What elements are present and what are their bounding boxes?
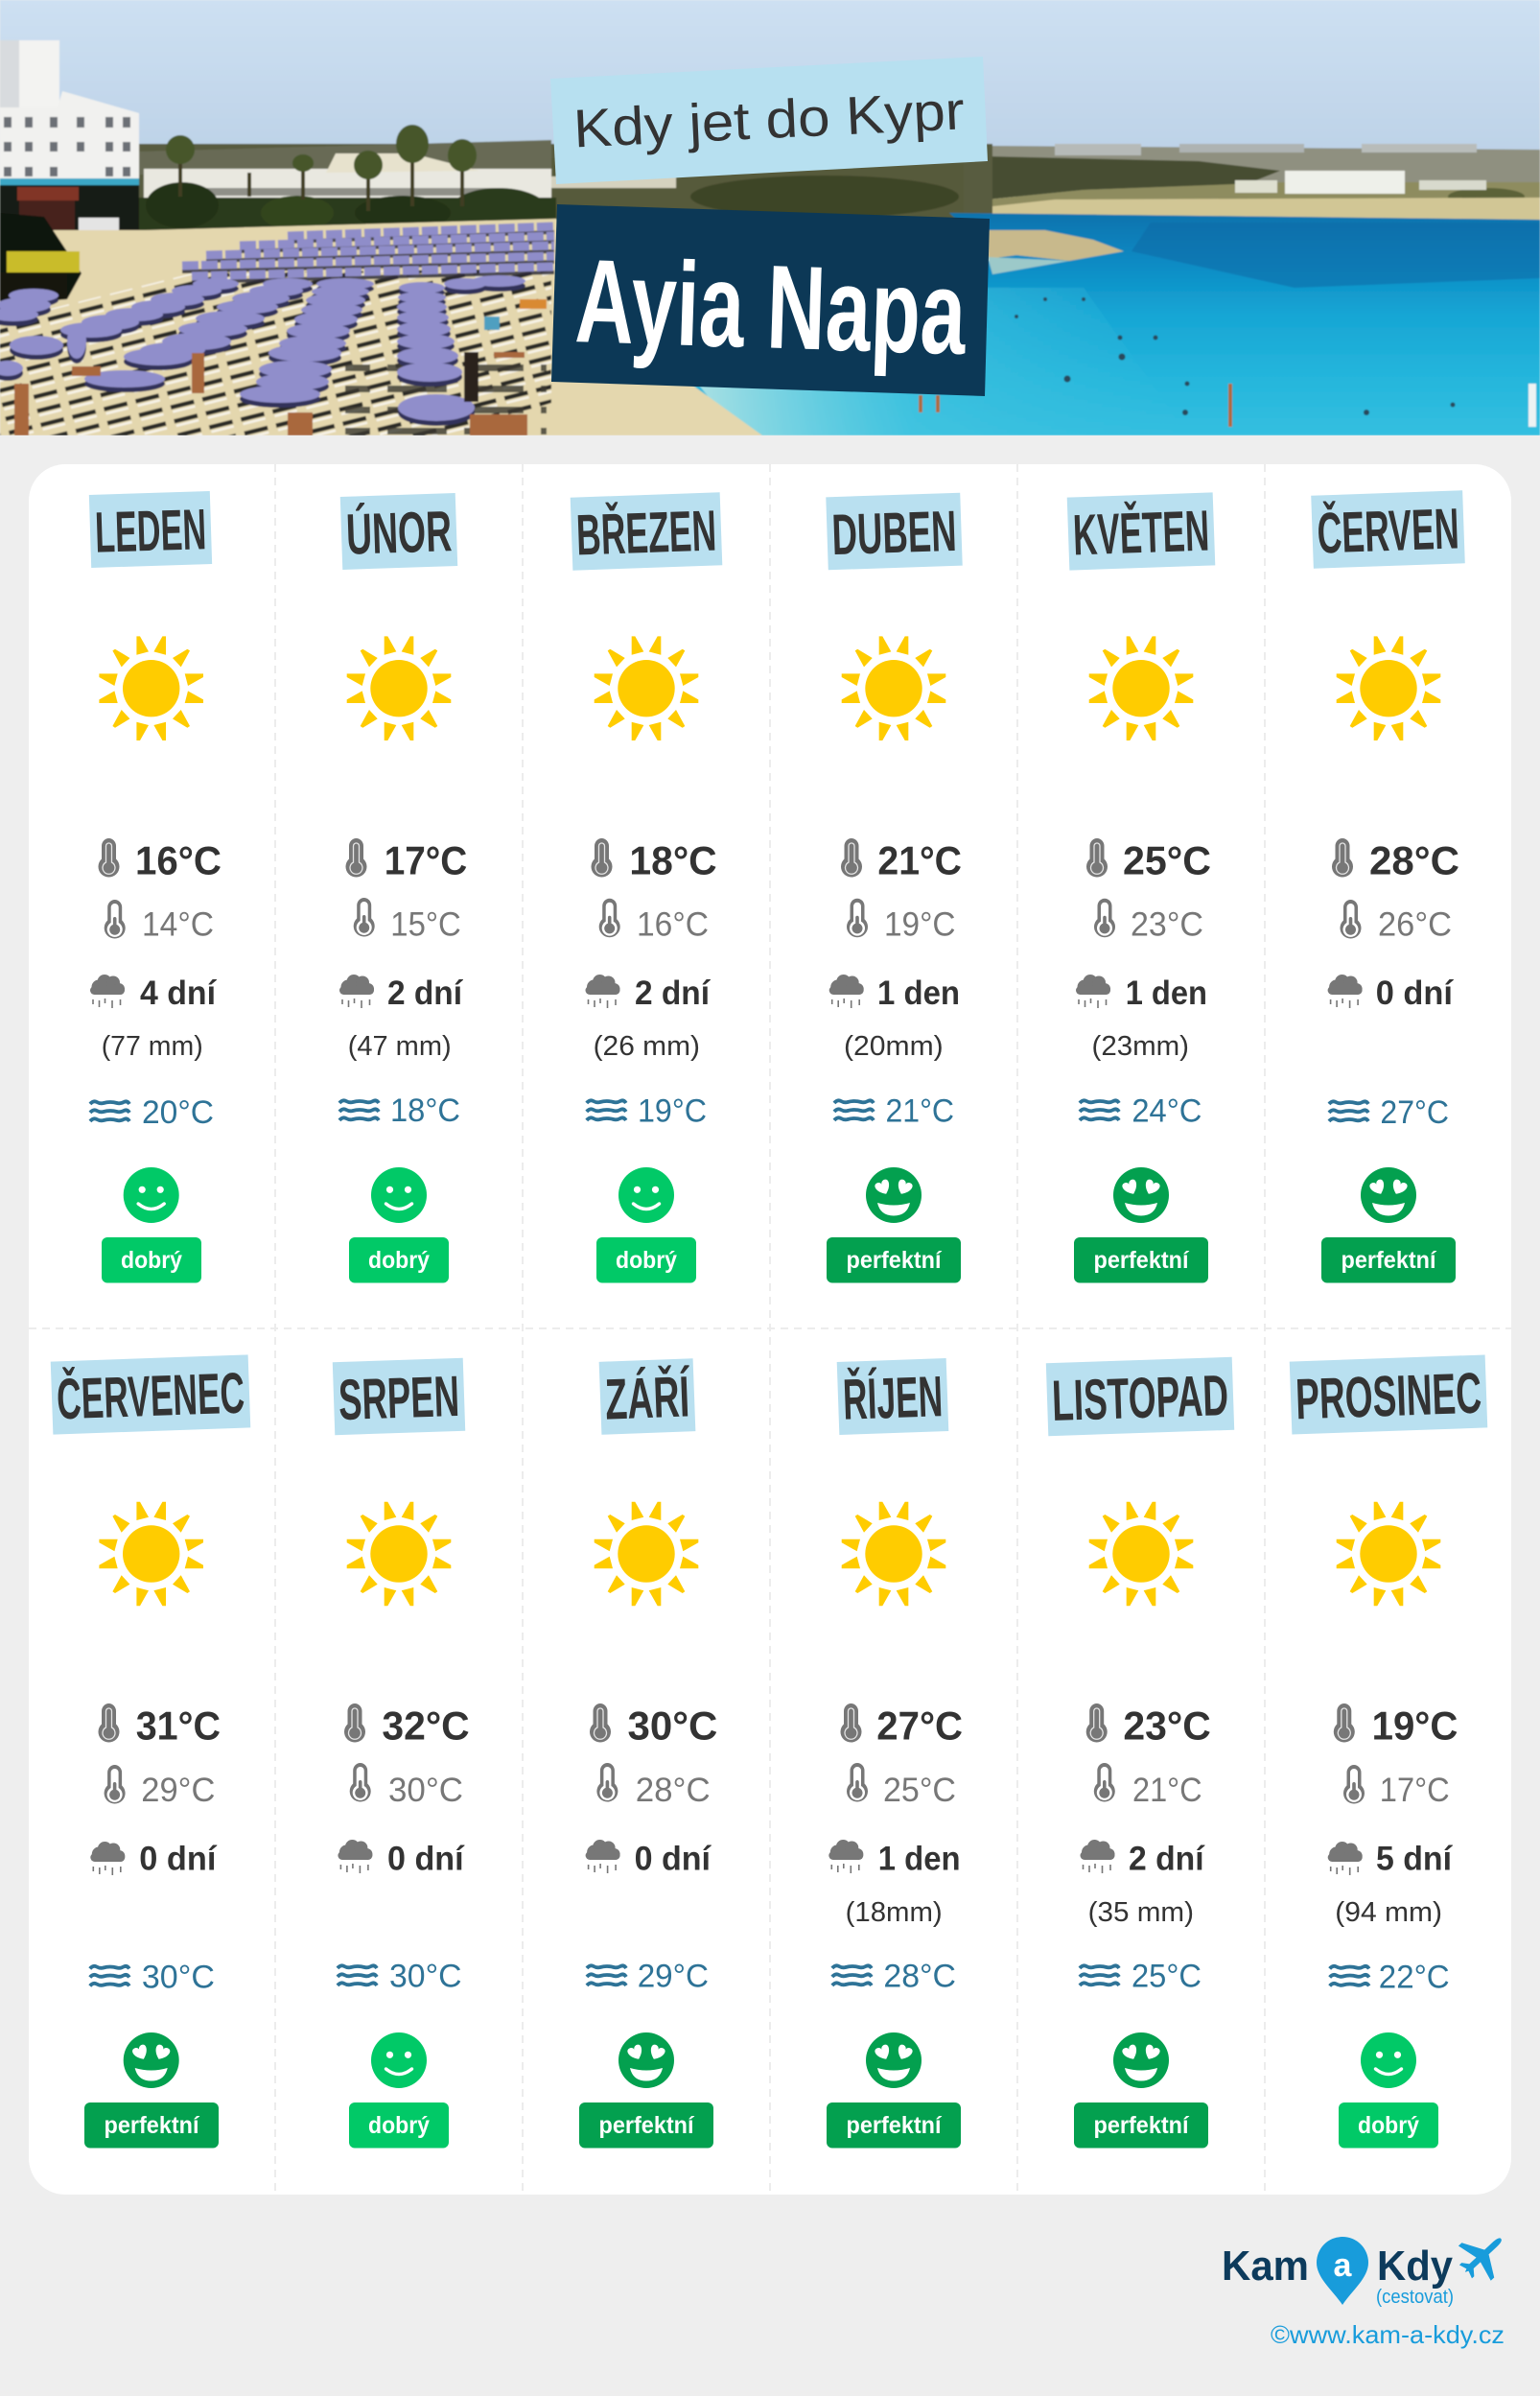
- icon: smiley: [1361, 2032, 1416, 2088]
- rating badge: perfektní: [846, 2112, 942, 2139]
- icon: thermometer min: [596, 1763, 618, 1802]
- icon: thermometer min: [350, 1763, 371, 1802]
- icon: waves: [1330, 1966, 1369, 1985]
- month heading: [51, 1354, 250, 1435]
- rating badge: perfektní: [598, 2112, 694, 2139]
- rating badge: [827, 2102, 961, 2149]
- month heading: [599, 1358, 695, 1435]
- rainfall: (94 mm): [1335, 1897, 1442, 1928]
- icon: sun: [595, 636, 698, 740]
- rain days: 2 dní: [387, 975, 463, 1012]
- icon: thermometer min: [847, 1763, 868, 1802]
- month heading: [837, 1358, 948, 1435]
- max temperature: 18°C: [629, 838, 717, 882]
- icon: smiley: [618, 1167, 674, 1223]
- icon: rain cloud: [585, 975, 619, 1008]
- icon: waves: [832, 1965, 872, 1985]
- rating badge: [1339, 2102, 1438, 2149]
- icon: thermometer max: [345, 838, 366, 878]
- rating badge: dobrý: [121, 1247, 182, 1274]
- panel: prosinec: [1290, 1354, 1487, 2149]
- icon: waves: [90, 1101, 129, 1121]
- icon: thermometer min: [1094, 899, 1115, 937]
- icon: rain cloud: [1076, 975, 1110, 1008]
- website credit: ©www.kam-a-kdy.cz: [1271, 2320, 1505, 2349]
- title: Kdy jet do Kypr: Kdy jet do Kypr: [572, 80, 966, 158]
- sea temperature: 30°C: [142, 1960, 215, 1996]
- min temperature: 29°C: [141, 1772, 215, 1809]
- header photo: Ayia Napa beach: [0, 0, 1540, 435]
- icon: smiley: [124, 1167, 179, 1223]
- icon: rain cloud: [1080, 1840, 1114, 1873]
- icon: thermometer max: [1332, 838, 1353, 878]
- sea temperature: 21°C: [886, 1092, 954, 1129]
- rainfall: (26 mm): [594, 1031, 700, 1062]
- icon: rain cloud: [586, 1840, 620, 1873]
- max temperature: 19°C: [1372, 1703, 1458, 1748]
- icon: rain cloud: [339, 975, 374, 1008]
- month heading: [333, 1358, 465, 1435]
- panel: květen: [1067, 492, 1215, 1283]
- icon: heart-eyes smiley: [866, 2032, 922, 2088]
- panel: listopad: [1046, 1357, 1234, 2149]
- rain days: 1 den: [878, 1841, 961, 1878]
- rain days: 0 dní: [139, 1841, 218, 1878]
- min temperature: 23°C: [1131, 906, 1203, 944]
- rating badge: [596, 1237, 696, 1283]
- icon: location pin: [1317, 2237, 1368, 2305]
- sea temperature: 24°C: [1132, 1092, 1202, 1129]
- icon: thermometer min: [1094, 1763, 1115, 1802]
- month heading: SRPEN: [338, 1364, 460, 1432]
- rating badge: perfektní: [1093, 2112, 1189, 2139]
- rain days: 0 dní: [1376, 975, 1454, 1012]
- month heading: ŘÍJEN: [842, 1364, 944, 1432]
- icon: thermometer max: [344, 1703, 365, 1743]
- icon: waves: [587, 1100, 626, 1120]
- min temperature: 16°C: [637, 906, 709, 944]
- icon: location pin: a: [1334, 2247, 1353, 2284]
- rainfall: (35 mm): [1088, 1897, 1194, 1928]
- month heading: ÚNOR: [345, 499, 453, 567]
- rainfall: (23mm): [1091, 1031, 1189, 1062]
- rating badge: perfektní: [104, 2112, 199, 2139]
- icon: smiley: [371, 1167, 427, 1223]
- rating badge: [1074, 1237, 1208, 1283]
- panel: červen: [1311, 490, 1465, 1282]
- sea temperature: 25°C: [1132, 1959, 1202, 1995]
- min temperature: 25°C: [883, 1772, 956, 1809]
- rain days: 2 dní: [635, 975, 711, 1012]
- month heading: LISTOPAD: [1051, 1363, 1229, 1433]
- panel: říjen: [827, 1358, 963, 2149]
- icon: sun: [842, 636, 945, 740]
- icon: sun: [595, 1502, 698, 1606]
- min temperature: 21°C: [1132, 1772, 1202, 1809]
- rating badge: dobrý: [368, 1247, 430, 1274]
- rating badge: perfektní: [1341, 1247, 1436, 1274]
- logo wordmark: Kdy: Kdy: [1377, 2243, 1454, 2290]
- icon: thermometer max: [840, 1703, 861, 1743]
- icon: waves: [587, 1965, 626, 1985]
- logo wordmark: Kam: Kam: [1222, 2243, 1309, 2290]
- rating badge: [827, 1237, 961, 1283]
- panel: leden: [89, 491, 222, 1283]
- icon: sun: [1089, 636, 1193, 740]
- month heading: [1311, 490, 1465, 569]
- rain days: 2 dní: [1129, 1841, 1205, 1878]
- max temperature: 27°C: [876, 1703, 963, 1748]
- panel: březen: [571, 492, 722, 1283]
- icon: thermometer min: [105, 900, 126, 939]
- rain days: 0 dní: [387, 1841, 465, 1878]
- rating badge: [1321, 1237, 1456, 1283]
- sea temperature: 29°C: [638, 1959, 709, 1995]
- rain days: 0 dní: [635, 1841, 712, 1878]
- rating badge: [84, 2102, 219, 2149]
- month heading: [571, 492, 722, 571]
- month heading: ČERVENEC: [56, 1361, 245, 1431]
- sea temperature: 20°C: [142, 1094, 214, 1131]
- logo: Kam a Kdy: [1222, 2221, 1517, 2308]
- min temperature: 17°C: [1380, 1772, 1450, 1809]
- icon: thermometer min: [599, 899, 620, 937]
- rating badge: [1074, 2102, 1208, 2149]
- rainfall: (47 mm): [348, 1031, 452, 1062]
- title: Ayia Napa: Ayia Napa: [573, 235, 968, 380]
- month heading: [1046, 1357, 1234, 1436]
- panel: duben: [826, 493, 963, 1283]
- icon: sun: [1337, 636, 1440, 740]
- icon: rain cloud: [1328, 1842, 1363, 1875]
- sea temperature: 19°C: [638, 1092, 707, 1129]
- icon: rain cloud: [828, 1840, 863, 1873]
- icon: waves: [834, 1100, 874, 1120]
- icon: smiley: [371, 2032, 427, 2088]
- rainfall: (18mm): [846, 1897, 943, 1928]
- icon: rain cloud: [1328, 975, 1363, 1008]
- max temperature: 28°C: [1369, 838, 1459, 882]
- icon: waves: [1329, 1101, 1368, 1121]
- icon: waves: [339, 1100, 379, 1120]
- rating badge: dobrý: [368, 2112, 430, 2139]
- max temperature: 32°C: [382, 1703, 470, 1748]
- month heading: DUBEN: [830, 499, 958, 567]
- icon: thermometer min: [847, 899, 868, 937]
- icon: sun: [842, 1502, 945, 1606]
- icon: rain cloud: [90, 1842, 125, 1875]
- sea temperature: 18°C: [390, 1092, 460, 1129]
- rating badge: perfektní: [1093, 1247, 1189, 1274]
- icon: thermometer max: [98, 1703, 119, 1743]
- icon: rain cloud: [90, 975, 125, 1008]
- icon: thermometer min: [354, 898, 375, 937]
- icon: thermometer max: [1086, 838, 1108, 878]
- icon: rain cloud: [829, 975, 864, 1008]
- icon: thermometer min: [105, 1765, 126, 1804]
- panel: monthly climate card: [29, 464, 1511, 2195]
- icon: thermometer max: [841, 838, 862, 878]
- month heading: ZÁŘÍ: [604, 1364, 691, 1432]
- rating badge: dobrý: [1358, 2112, 1419, 2139]
- month heading: LEDEN: [94, 497, 207, 565]
- panel: září: [579, 1358, 717, 2149]
- sea temperature: 30°C: [389, 1959, 462, 1995]
- icon: airplane: [1449, 2221, 1517, 2290]
- icon: heart-eyes smiley: [618, 2032, 674, 2088]
- icon: rain cloud: [338, 1840, 372, 1873]
- rainfall: (20mm): [844, 1031, 944, 1062]
- icon: thermometer min: [1341, 900, 1362, 939]
- icon: sun: [99, 1502, 203, 1606]
- icon: thermometer max: [98, 838, 119, 878]
- title: Kdy jet do Kypr: [550, 57, 988, 184]
- icon: heart-eyes smiley: [866, 1167, 922, 1223]
- sea temperature: 27°C: [1380, 1094, 1449, 1131]
- panel: červenec: [51, 1354, 250, 2149]
- sea temperature: 22°C: [1379, 1960, 1450, 1996]
- rating badge: [349, 2102, 449, 2149]
- max temperature: 16°C: [135, 838, 222, 882]
- icon: sun: [347, 636, 451, 740]
- max temperature: 17°C: [385, 838, 467, 882]
- icon: sun: [347, 1502, 451, 1606]
- month heading: KVĚTEN: [1072, 499, 1210, 567]
- icon: waves: [90, 1966, 129, 1985]
- min temperature: 19°C: [884, 906, 955, 944]
- rating badge: [349, 1237, 449, 1283]
- month heading: [826, 493, 963, 570]
- rating badge: [102, 1237, 201, 1283]
- min temperature: 30°C: [388, 1772, 463, 1809]
- icon: heart-eyes smiley: [124, 2032, 179, 2088]
- icon: thermometer max: [591, 838, 612, 878]
- max temperature: 30°C: [627, 1703, 717, 1748]
- logo tagline: (cestovat): [1376, 2287, 1454, 2308]
- icon: thermometer max: [1334, 1703, 1355, 1743]
- icon: sun: [1089, 1502, 1193, 1606]
- icon: heart-eyes smiley: [1113, 1167, 1169, 1223]
- rain days: 4 dní: [140, 975, 217, 1012]
- max temperature: 21°C: [877, 838, 962, 882]
- min temperature: 28°C: [636, 1772, 711, 1809]
- rain days: 1 den: [1126, 975, 1207, 1012]
- icon: thermometer max: [1086, 1703, 1108, 1743]
- rating badge: perfektní: [846, 1247, 942, 1274]
- icon: sun: [99, 636, 203, 740]
- icon: waves: [1080, 1100, 1119, 1120]
- icon: thermometer min: [1343, 1765, 1365, 1804]
- min temperature: 14°C: [142, 906, 214, 944]
- panel: srpen: [333, 1358, 470, 2149]
- month heading: [1067, 492, 1215, 571]
- rain days: 5 dní: [1376, 1841, 1453, 1878]
- min temperature: 26°C: [1378, 906, 1452, 944]
- month heading: [89, 491, 212, 568]
- rating badge: dobrý: [616, 1247, 677, 1274]
- title: Ayia Napa: [551, 204, 990, 396]
- icon: waves: [338, 1965, 377, 1985]
- icon: waves: [1080, 1965, 1119, 1985]
- panel: únor: [339, 493, 467, 1283]
- rating badge: [579, 2102, 713, 2149]
- rainfall: (77 mm): [102, 1031, 203, 1062]
- icon: thermometer max: [590, 1703, 611, 1743]
- icon: sun: [1337, 1502, 1440, 1606]
- icon: heart-eyes smiley: [1361, 1167, 1416, 1223]
- max temperature: 31°C: [136, 1703, 221, 1748]
- month heading: [340, 493, 457, 570]
- sea temperature: 28°C: [883, 1959, 956, 1995]
- min temperature: 15°C: [390, 906, 461, 944]
- max temperature: 23°C: [1123, 1703, 1211, 1748]
- rain days: 1 den: [877, 975, 960, 1012]
- max temperature: 25°C: [1123, 838, 1211, 882]
- icon: heart-eyes smiley: [1113, 2032, 1169, 2088]
- month heading: BŘEZEN: [575, 498, 717, 568]
